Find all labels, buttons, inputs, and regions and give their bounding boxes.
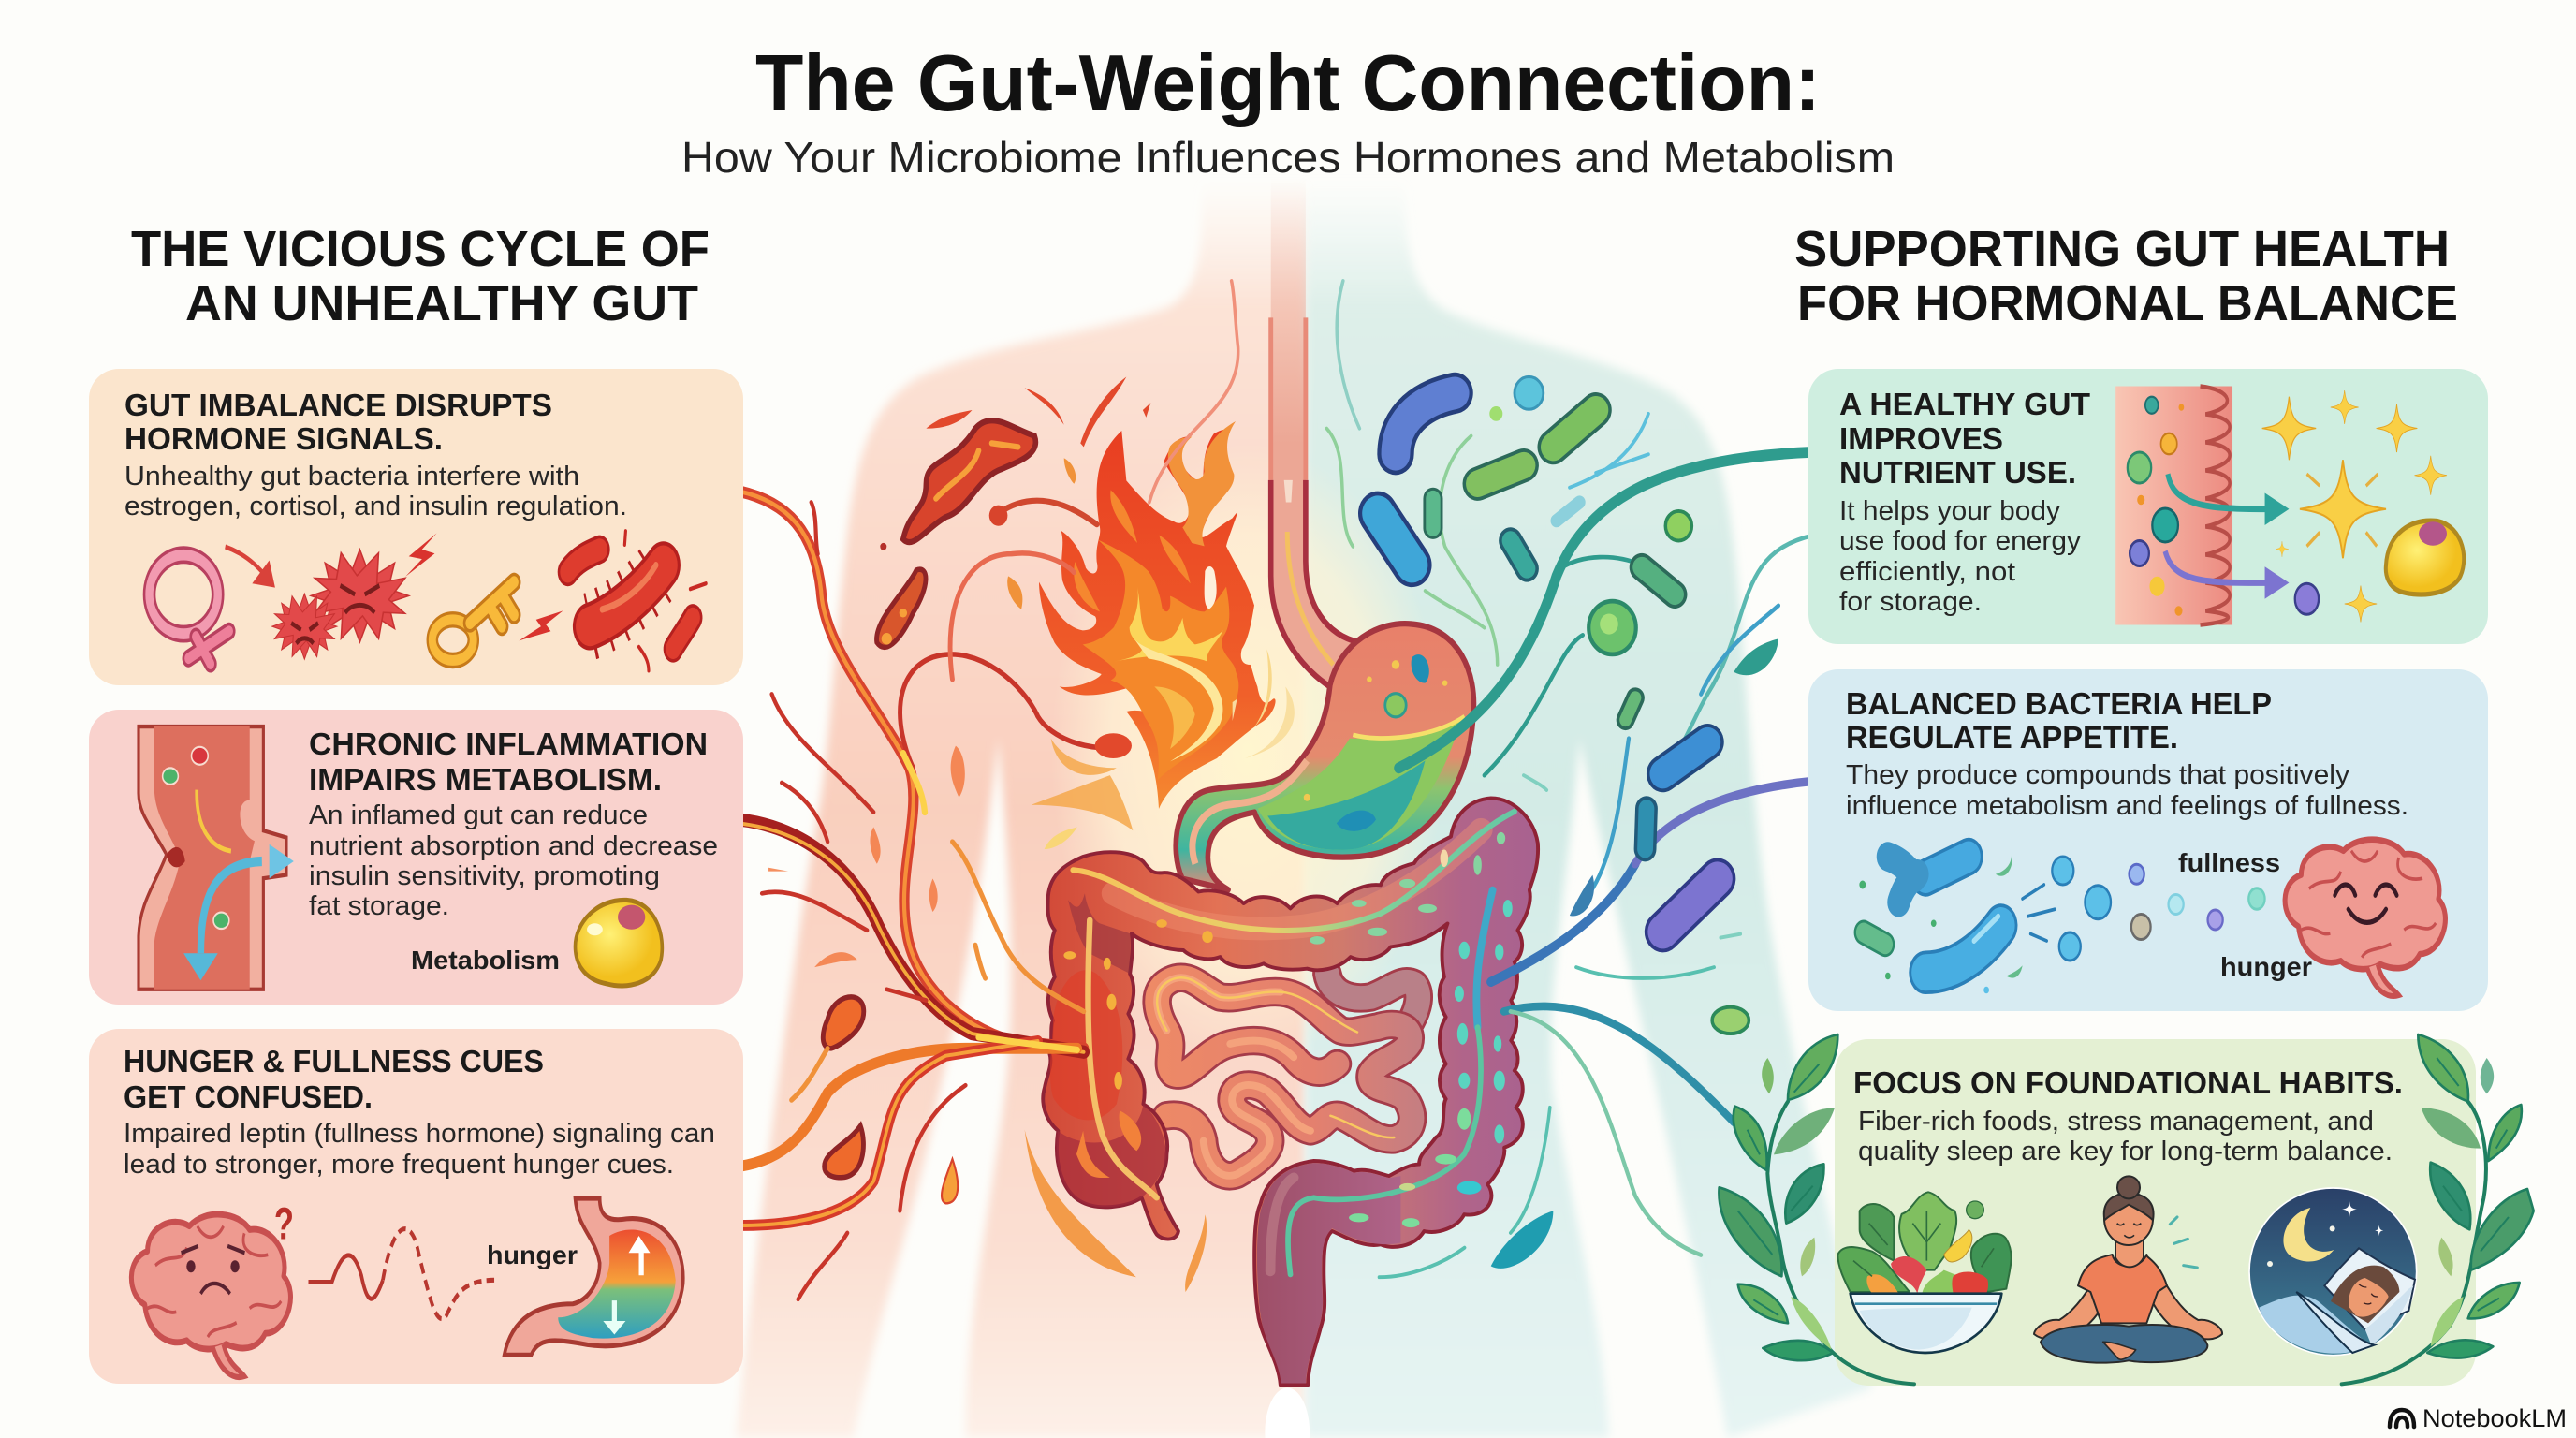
left column heading: AN UNHEALTHY GUT <box>185 275 698 331</box>
panel body text <box>1839 496 2082 617</box>
panel background <box>89 369 743 685</box>
healthy bacteria, right <box>1378 376 1778 1269</box>
panel heading: NUTRIENT USE. <box>1839 455 2076 490</box>
laurel: left branch <box>1719 1034 1914 1384</box>
arrow: nutrients to cells <box>2165 551 2289 599</box>
panel body text <box>124 462 627 521</box>
icon: signal molecules <box>1859 853 2265 993</box>
right half artwork <box>2034 1034 2534 1384</box>
panel background <box>1808 669 2488 1011</box>
inflamed veins, left <box>739 281 1238 1299</box>
left half artwork <box>1719 1034 2012 1384</box>
panel heading: A HEALTHY GUT <box>1839 387 2090 421</box>
warm glow <box>1051 443 1445 1064</box>
icon: moon and sleeping person <box>2249 1188 2417 1356</box>
icon: confused brain <box>131 1214 290 1377</box>
laurel: right branch <box>2342 1034 2534 1384</box>
panel heading <box>1846 686 2272 755</box>
panel body text <box>1846 760 2408 821</box>
panel body text <box>1858 1107 2393 1167</box>
panel heading: IMPROVES <box>1839 421 2003 456</box>
panel background <box>1808 369 2488 644</box>
panel heading: GUT IMBALANCE DISRUPTS <box>124 388 552 422</box>
panel heading: HUNGER & FULLNESS CUES <box>124 1044 544 1078</box>
panel body text: fat storage. <box>309 891 449 921</box>
body silhouette <box>736 181 1872 1438</box>
icons: hormones disrupted by bacteria <box>150 531 706 670</box>
panel heading: CHRONIC INFLAMMATION <box>309 726 708 761</box>
icon: red bacteria <box>568 531 706 670</box>
right column heading: SUPPORTING GUT HEALTH <box>1794 221 2450 277</box>
title block <box>681 39 1895 182</box>
left column heading: THE VICIOUS CYCLE OF <box>131 221 710 277</box>
logo icon <box>2390 1410 2414 1427</box>
panel body text: lead to stronger, more frequent hunger cues. <box>124 1150 674 1180</box>
icon: happy brain <box>2285 840 2445 996</box>
panel heading: IMPAIRS METABOLISM. <box>309 762 662 797</box>
panel body text: Impaired leptin (fullness hormone) signaling can <box>124 1119 715 1149</box>
panel body text: Fiber-rich foods, stress management, and <box>1858 1107 2374 1137</box>
icon: purple nutrient <box>2295 583 2319 614</box>
panel body text: nutrient absorption and decrease <box>309 831 718 861</box>
icon: venus symbol <box>150 555 229 664</box>
healthy right half <box>1306 181 1872 1438</box>
panel: chronic inflammation impairs metabolism <box>89 710 743 1005</box>
panel body text: use food for energy <box>1839 526 2082 556</box>
panel: healthy gut improves nutrient use <box>1808 369 2488 644</box>
panel background <box>89 1029 743 1384</box>
panel body text: influence metabolism and feelings of fullness. <box>1846 791 2408 821</box>
colon <box>1043 798 1538 1385</box>
stomach <box>1176 624 1473 889</box>
icon: meditating person <box>2034 1176 2222 1363</box>
icons <box>139 726 662 990</box>
panel heading: REGULATE APPETITE. <box>1846 720 2178 755</box>
label: hunger: hunger <box>487 1240 578 1269</box>
icon: blue bacteria <box>1864 857 2055 973</box>
icons <box>2115 386 2464 625</box>
icon: lightning 2 <box>519 610 563 640</box>
panel body text: An inflamed gut can reduce <box>309 800 648 830</box>
panel background <box>89 710 743 1005</box>
red sparks and bacteria, left <box>768 376 1207 1292</box>
chart: disrupted signal wave <box>308 1229 495 1319</box>
central body illustration <box>736 178 1872 1438</box>
icon: question mark: ? <box>274 1198 294 1249</box>
small intestine <box>1157 974 1418 1176</box>
icon: lightning <box>405 533 437 577</box>
panel body text: insulin sensitivity, promoting <box>309 861 660 891</box>
esophagus and stomach <box>1176 178 1473 889</box>
arrow head <box>252 561 275 588</box>
healthy vines, right <box>1326 281 1812 1277</box>
icon: leaky gut wall <box>139 726 294 990</box>
panel: focus on foundational habits <box>1719 1034 2534 1386</box>
panel heading: GET CONFUSED. <box>124 1079 373 1114</box>
label: metabolism: Metabolism <box>411 946 560 975</box>
panel heading: BALANCED BACTERIA HELP <box>1846 686 2272 721</box>
right column heading <box>1794 221 2458 331</box>
panel: balanced bacteria regulate appetite <box>1808 669 2488 1011</box>
panel body text <box>309 800 718 921</box>
icon: golden key <box>432 582 514 660</box>
panel heading <box>124 1044 544 1114</box>
icon: angry spiky cells <box>262 536 424 669</box>
icons <box>131 1198 683 1377</box>
panel body text: for storage. <box>1839 587 1982 617</box>
logo text: NotebookLM <box>2422 1404 2567 1432</box>
arrow: nutrients to energy <box>2168 474 2289 525</box>
panel: hunger and fullness cues <box>89 1029 743 1384</box>
veins, bacteria and vines <box>739 281 1812 1299</box>
panel body text: They produce compounds that positively <box>1846 760 2350 790</box>
panel heading <box>1839 387 2090 490</box>
intestines <box>1043 798 1538 1385</box>
flame <box>1039 421 1295 809</box>
label: fullness: fullness <box>2178 848 2280 877</box>
NotebookLM logo <box>2390 1404 2567 1432</box>
unhealthy left half <box>736 181 1306 1438</box>
panel heading <box>124 388 552 456</box>
subtitle: How Your Microbiome Influences Hormones and Metabolism <box>681 133 1895 182</box>
icon: fat cell <box>2386 521 2464 594</box>
panel body text: quality sleep are key for long-term balance. <box>1858 1137 2393 1167</box>
panel body text <box>124 1119 715 1180</box>
panel body text: Unhealthy gut bacteria interfere with <box>124 462 579 492</box>
right column heading: FOR HORMONAL BALANCE <box>1797 275 2458 331</box>
panel body text: estrogen, cortisol, and insulin regulation. <box>124 492 627 521</box>
label: hunger: hunger <box>2220 952 2312 981</box>
panel body text: It helps your body <box>1839 496 2061 526</box>
icon: salad bowl <box>1837 1192 2012 1353</box>
panel: gut imbalance disrupts hormone signals <box>89 369 743 685</box>
esophagus <box>1271 178 1359 687</box>
left column heading <box>131 221 710 331</box>
icon: intestinal lining with nutrients <box>2115 386 2232 625</box>
icon: stomach with up and down arrows <box>505 1198 683 1355</box>
panel background <box>1835 1039 2476 1386</box>
icons <box>1859 840 2445 996</box>
panel heading <box>309 726 708 797</box>
icon: fat cell <box>576 900 662 986</box>
panel heading: HORMONE SIGNALS. <box>124 421 443 456</box>
panel heading: FOCUS ON FOUNDATIONAL HABITS. <box>1853 1065 2403 1100</box>
icon: energy sparkles <box>2262 390 2447 622</box>
panel body text: efficiently, not <box>1839 557 2015 587</box>
main title: The Gut-Weight Connection: <box>755 39 1821 128</box>
icon: red arrow <box>226 547 270 580</box>
bottom pelvic highlight <box>1265 1387 1310 1438</box>
